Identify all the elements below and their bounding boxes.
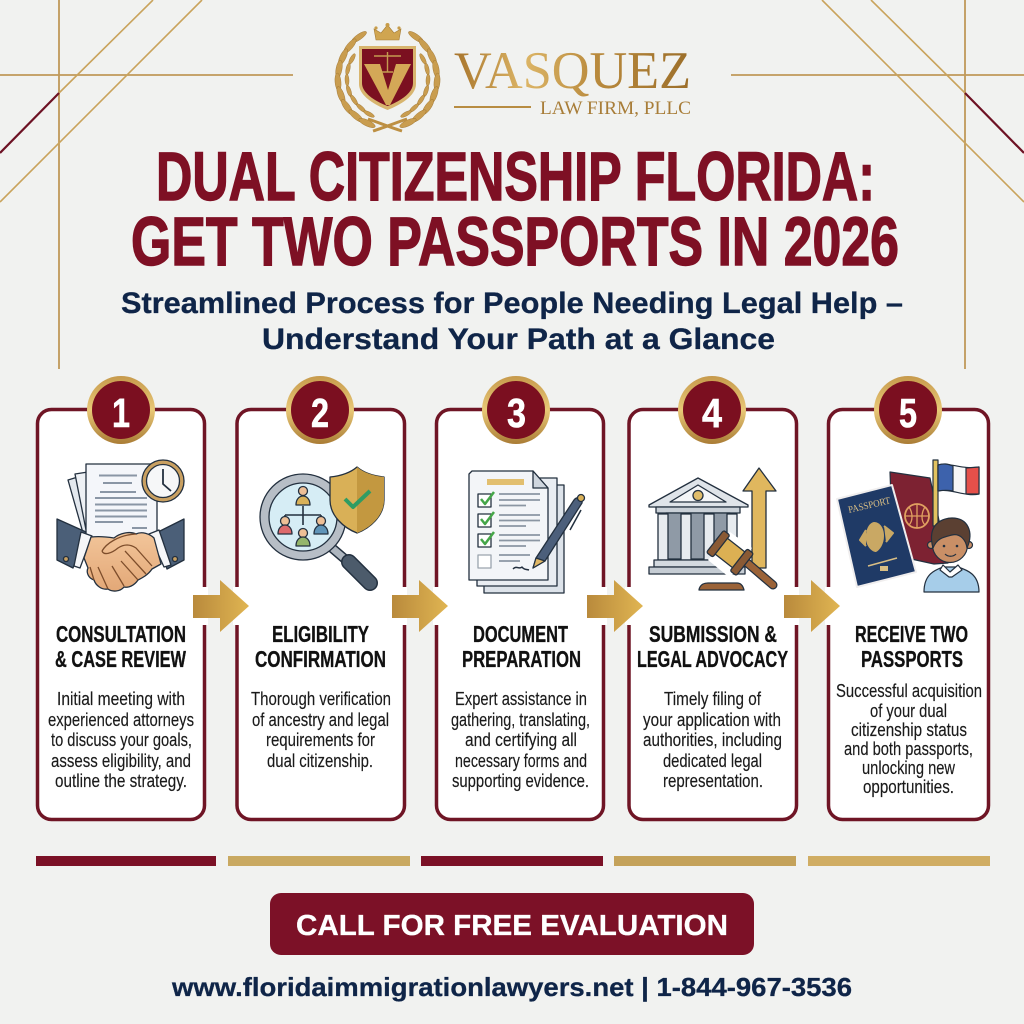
- step 4 description: representation.: [663, 771, 763, 791]
- step 5 description: Successful acquisition: [836, 681, 982, 701]
- step 5 heading: [855, 621, 968, 672]
- footer contact line: www.floridaimmigrationlawyers.net | 1-844-967-3536: [171, 972, 852, 1002]
- icon: magnifier with family tree and shield: [260, 467, 384, 583]
- step 4 badge: 4: [702, 390, 722, 436]
- decorative corner lines: [0, 0, 1024, 369]
- step 3 badge: [482, 376, 550, 444]
- step 5 badge: 5: [899, 390, 917, 436]
- step 2 description: of ancestry and legal: [252, 710, 389, 730]
- step 5 badge: [874, 376, 942, 444]
- step 1 description: Initial meeting with: [57, 689, 185, 709]
- step 5 description: opportunities.: [863, 777, 954, 797]
- panel: step 5 receive passports: [828, 376, 988, 820]
- step 5 description: [836, 681, 982, 797]
- card border gaps: [201, 587, 832, 625]
- logo wordmark: VASQUEZ: [454, 42, 691, 100]
- step 1 heading: CONSULTATION: [56, 621, 186, 647]
- step 1 badge: [87, 376, 155, 444]
- step 3 description: and certifying all: [465, 730, 577, 750]
- step 1 description: [48, 689, 194, 791]
- step 2 description: dual citizenship.: [267, 751, 373, 771]
- call to action button: CALL FOR FREE EVALUATION: [296, 910, 728, 942]
- step 5 description: of your dual: [870, 701, 947, 721]
- logo: Vasquez Law Firm: [334, 23, 691, 131]
- arrow: step 2 to 3: [392, 580, 448, 632]
- step 3 description: Expert assistance in: [455, 689, 587, 709]
- step 2 badge: 2: [311, 390, 329, 436]
- panel: step 4 submission: [629, 376, 796, 820]
- step 1 heading: & CASE REVIEW: [55, 646, 186, 672]
- step 3 description: [451, 689, 590, 791]
- panel: step 3 document preparation: [436, 376, 604, 820]
- step 2 heading: CONFIRMATION: [255, 646, 386, 672]
- subtitle: [121, 287, 903, 356]
- step 1 description: experienced attorneys: [48, 710, 194, 730]
- panel: step 1 consultation: [38, 376, 204, 820]
- title: [131, 138, 899, 280]
- icon: courthouse, gavel and up arrow: [649, 468, 776, 590]
- arrow: step 1 to 2: [193, 580, 249, 632]
- step 2 heading: [255, 621, 386, 672]
- step 5 heading: PASSPORTS: [861, 646, 963, 672]
- step 4 description: Timely filing of: [664, 689, 762, 709]
- step 4 badge: [678, 376, 746, 444]
- step 4 description: your application with: [643, 710, 781, 730]
- step 3 badge: 3: [507, 390, 526, 436]
- step 2 description: Thorough verification: [251, 689, 391, 709]
- step 3 description: necessary forms and: [455, 751, 587, 771]
- step 4 heading: SUBMISSION &: [649, 621, 777, 647]
- icon: passports, flag and person: [837, 460, 979, 592]
- step 1 heading: [55, 621, 186, 672]
- step 5 heading: RECEIVE TWO: [855, 621, 968, 647]
- step 2 description: requirements for: [266, 730, 375, 750]
- step 3 description: gathering, translating,: [451, 710, 590, 730]
- step 4 description: dedicated legal: [663, 751, 762, 771]
- step 1 description: outline the strategy.: [55, 771, 187, 791]
- step 2 badge: [286, 376, 354, 444]
- step 3 heading: DOCUMENT: [473, 621, 568, 647]
- step 5 description: and both passports,: [844, 739, 973, 759]
- step 1 description: to discuss your goals,: [51, 730, 192, 750]
- arrow: step 3 to 4: [587, 580, 643, 632]
- subtitle: Understand Your Path at a Glance: [262, 323, 775, 356]
- icon: handshake and document: [57, 460, 184, 591]
- step 1 description: assess eligibility, and: [51, 751, 191, 771]
- icon: checklist and pen: [469, 471, 584, 593]
- logo sub-line: LAW FIRM, PLLC: [540, 98, 691, 119]
- step 4 heading: LEGAL ADVOCACY: [637, 646, 788, 672]
- step 5 description: citizenship status: [851, 720, 967, 740]
- step 4 description: authorities, including: [643, 730, 782, 750]
- arrow: step 4 to 5: [784, 580, 840, 632]
- call to action button: [270, 893, 754, 955]
- icon: passports, flag and person: PASSPORT: [847, 496, 892, 516]
- step 4 description: [643, 689, 782, 791]
- logo emblem: [334, 23, 441, 131]
- step 2 heading: ELIGIBILITY: [272, 621, 369, 647]
- step 5 description: unlocking new: [862, 758, 956, 778]
- step 3 description: supporting evidence.: [452, 771, 589, 791]
- progress bars: [36, 856, 990, 866]
- step 1 badge: 1: [112, 390, 130, 436]
- logo divider: [454, 106, 531, 108]
- subtitle: Streamlined Process for People Needing Legal Help –: [121, 287, 903, 320]
- step 2 description: [251, 689, 391, 771]
- step 3 heading: PREPARATION: [462, 646, 581, 672]
- step 4 heading: [637, 621, 788, 672]
- step 3 heading: [462, 621, 581, 672]
- panel: step 2 eligibility: [237, 376, 404, 820]
